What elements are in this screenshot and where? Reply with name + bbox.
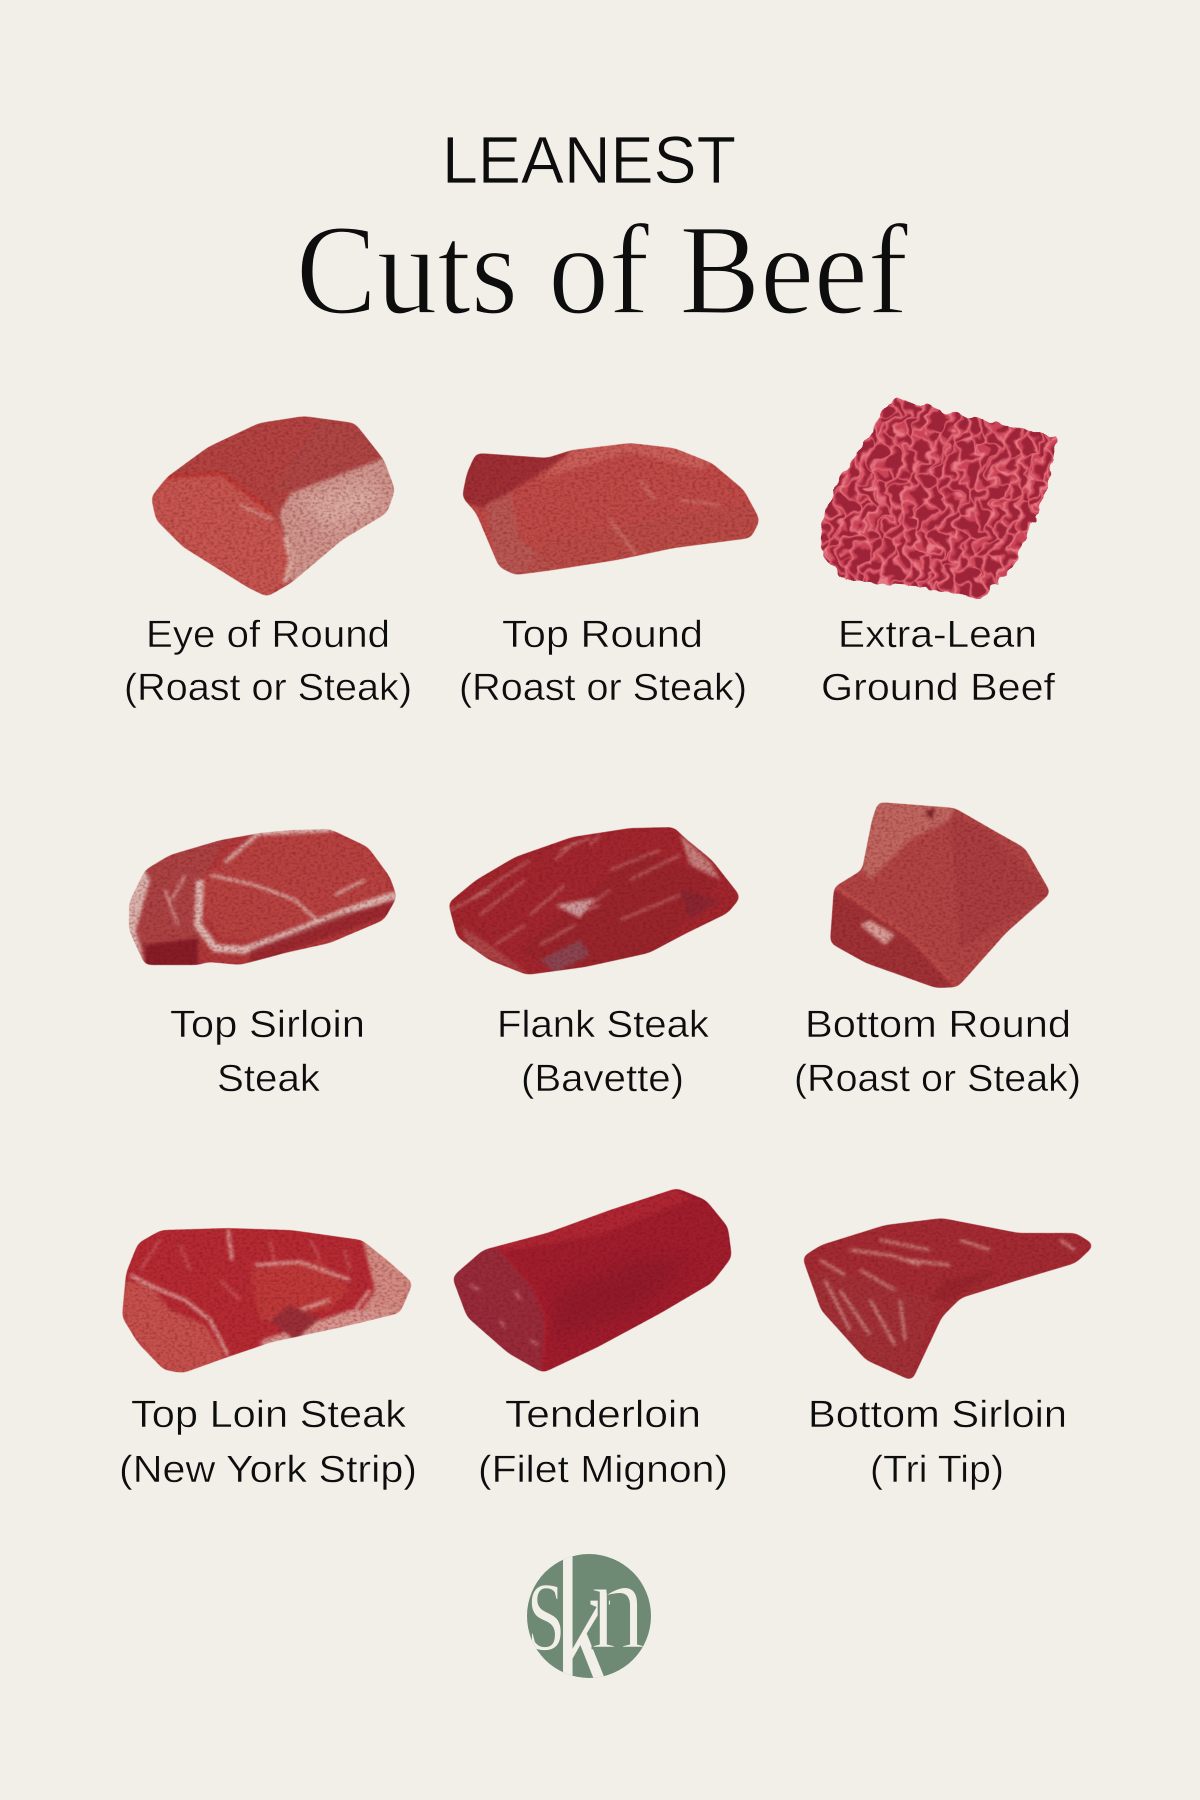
- title line: LEANEST: LEANEST: [442, 123, 736, 198]
- label: Flank Steak: [497, 1004, 710, 1046]
- icon: flank steak cut: [448, 827, 741, 975]
- label: Tenderloin: [505, 1394, 701, 1436]
- label: [808, 1394, 1067, 1491]
- icon: top round cut: [455, 443, 765, 580]
- label: Top Round: [502, 614, 703, 656]
- label: Top Loin Steak: [131, 1394, 407, 1436]
- label: [170, 1004, 365, 1100]
- logo: s: [527, 1526, 565, 1681]
- label: [119, 1394, 417, 1491]
- label: (Filet Mignon): [478, 1449, 728, 1491]
- icon: eye of round cut: [151, 416, 400, 597]
- label: Ground Beef: [821, 667, 1055, 709]
- panel: tenderloin: [452, 1188, 732, 1491]
- label: Bottom Round: [805, 1004, 1071, 1046]
- icon: top loin cut: [120, 1228, 416, 1376]
- label: [459, 614, 747, 709]
- title line: Cuts of Beef: Cuts of Beef: [296, 198, 908, 341]
- label: (New York Strip): [119, 1449, 417, 1491]
- panel: extra-lean ground beef: [820, 398, 1058, 700]
- icon: tri tip cut: [802, 1218, 1095, 1385]
- label: (Bavette): [521, 1058, 684, 1100]
- logo: [527, 1554, 651, 1678]
- label: [821, 614, 1055, 709]
- label: Eye of Round: [146, 614, 390, 656]
- label: Top Sirloin: [170, 1004, 365, 1046]
- label: (Roast or Steak): [794, 1058, 1081, 1100]
- label: Steak: [217, 1058, 321, 1100]
- panel: top loin steak: [119, 1228, 417, 1491]
- label: [124, 614, 412, 709]
- label: (Roast or Steak): [124, 667, 412, 709]
- icon: top sirloin cut: [125, 829, 397, 968]
- title: [296, 123, 908, 341]
- logo: n: [590, 1533, 646, 1677]
- panel: bottom sirloin: [802, 1218, 1095, 1491]
- panel: bottom round: [794, 800, 1081, 1100]
- icon: tenderloin cut: [452, 1188, 732, 1373]
- label: (Tri Tip): [870, 1449, 1004, 1491]
- icon: ground beef: [820, 398, 1058, 599]
- label: Bottom Sirloin: [808, 1394, 1067, 1436]
- panel: flank steak: [448, 827, 741, 1100]
- logo: k: [552, 1515, 614, 1736]
- panel: top round: [455, 443, 765, 709]
- label: (Roast or Steak): [459, 667, 747, 709]
- label: [478, 1394, 728, 1491]
- icon: bottom round cut: [826, 800, 1051, 990]
- panel: top sirloin steak: [125, 829, 397, 1100]
- label: [794, 1004, 1081, 1100]
- panel: eye of round: [124, 416, 412, 709]
- label: Extra-Lean: [838, 614, 1037, 656]
- label: [497, 1004, 710, 1100]
